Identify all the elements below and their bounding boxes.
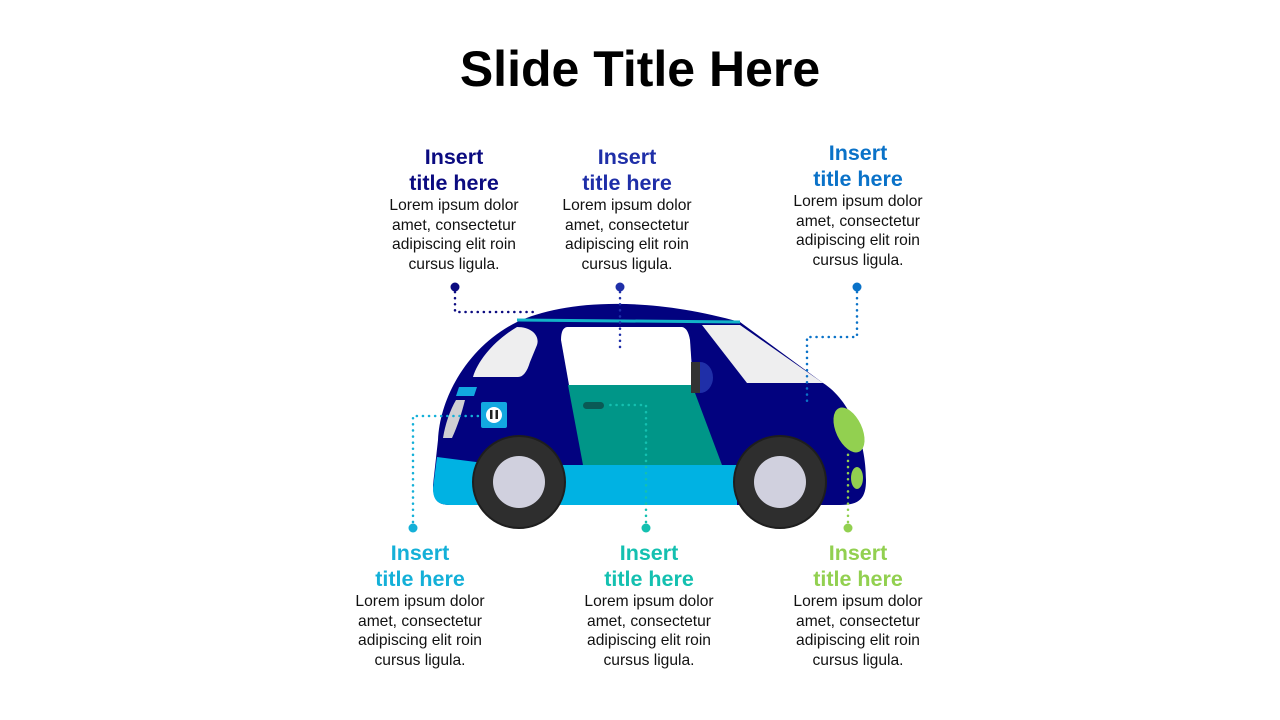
connector: bottom left bbox=[408, 416, 480, 532]
text block: top right: Lorem ipsum dolor bbox=[793, 193, 923, 210]
bottom band bbox=[433, 457, 737, 505]
text block: top right: amet, consectetur bbox=[796, 212, 920, 230]
mirror bbox=[691, 362, 713, 393]
roof stripe bbox=[517, 320, 740, 322]
front wheel bbox=[734, 436, 826, 528]
text block: top middle: adipiscing elit roin bbox=[565, 236, 689, 253]
text block: top middle bbox=[562, 145, 692, 272]
text block: top left: cursus ligula. bbox=[408, 256, 500, 272]
text block: top right: Insert bbox=[829, 141, 887, 165]
text block: bottom left: Insert bbox=[391, 541, 449, 565]
text block: bottom left: title here bbox=[375, 567, 465, 591]
door handle bbox=[583, 402, 604, 409]
door window bbox=[561, 327, 693, 385]
icon: fuel cap bbox=[481, 402, 507, 428]
text block: top middle: Lorem ipsum dolor bbox=[562, 197, 692, 214]
text block: top left: Insert bbox=[425, 145, 483, 169]
door bbox=[568, 385, 722, 465]
rear window bbox=[473, 327, 538, 377]
text block: top right: title here bbox=[813, 167, 903, 191]
text block: bottom right bbox=[793, 541, 923, 668]
text block: bottom right: Insert bbox=[829, 541, 887, 565]
text block: top right: adipiscing elit roin bbox=[796, 232, 920, 249]
text block: bottom right: title here bbox=[813, 567, 903, 591]
car illustration bbox=[433, 304, 871, 528]
text block: top left: adipiscing elit roin bbox=[392, 236, 516, 253]
text block: top middle: cursus ligula. bbox=[581, 256, 672, 272]
connector: top left bbox=[450, 282, 537, 312]
connector: top middle bbox=[616, 282, 624, 350]
text block: top middle: title here bbox=[582, 171, 672, 195]
text block: bottom right: adipiscing elit roin bbox=[796, 632, 920, 649]
text block: top middle: Insert bbox=[598, 145, 656, 169]
title: Slide Title Here bbox=[460, 41, 820, 97]
connector: bottom middle bbox=[607, 405, 650, 532]
text block: top left: title here bbox=[409, 171, 499, 195]
text block: top right bbox=[793, 141, 923, 268]
text block: top middle: amet, consectetur bbox=[565, 216, 689, 234]
text block: bottom left: amet, consectetur bbox=[358, 612, 482, 630]
tail lights bbox=[456, 387, 477, 396]
text block: bottom right: cursus ligula. bbox=[812, 652, 904, 668]
text block: bottom left: Lorem ipsum dolor bbox=[355, 593, 485, 610]
connector: top right bbox=[807, 282, 862, 403]
car body bbox=[433, 304, 866, 505]
text block: bottom right: Lorem ipsum dolor bbox=[793, 593, 923, 610]
text block: bottom left bbox=[355, 541, 485, 668]
text block: bottom middle bbox=[584, 541, 714, 668]
text block: bottom middle: cursus ligula. bbox=[603, 652, 694, 668]
text block: top left: Lorem ipsum dolor bbox=[389, 197, 519, 214]
text block: bottom left: cursus ligula. bbox=[374, 652, 466, 668]
text block: top right: cursus ligula. bbox=[812, 252, 904, 268]
rear wheel bbox=[473, 436, 565, 528]
text block: top left: amet, consectetur bbox=[392, 216, 516, 234]
text block: bottom middle: Lorem ipsum dolor bbox=[584, 593, 714, 610]
text block: bottom middle: amet, consectetur bbox=[587, 612, 711, 630]
headlights bbox=[827, 403, 871, 457]
text block: top left bbox=[389, 145, 519, 272]
windshield bbox=[702, 325, 823, 383]
text block: bottom middle: title here bbox=[604, 567, 694, 591]
text block: bottom middle: adipiscing elit roin bbox=[587, 632, 711, 649]
connector: bottom right bbox=[844, 452, 852, 532]
text block: bottom right: amet, consectetur bbox=[796, 612, 920, 630]
text block: bottom left: adipiscing elit roin bbox=[358, 632, 482, 649]
text block: bottom middle: Insert bbox=[620, 541, 678, 565]
